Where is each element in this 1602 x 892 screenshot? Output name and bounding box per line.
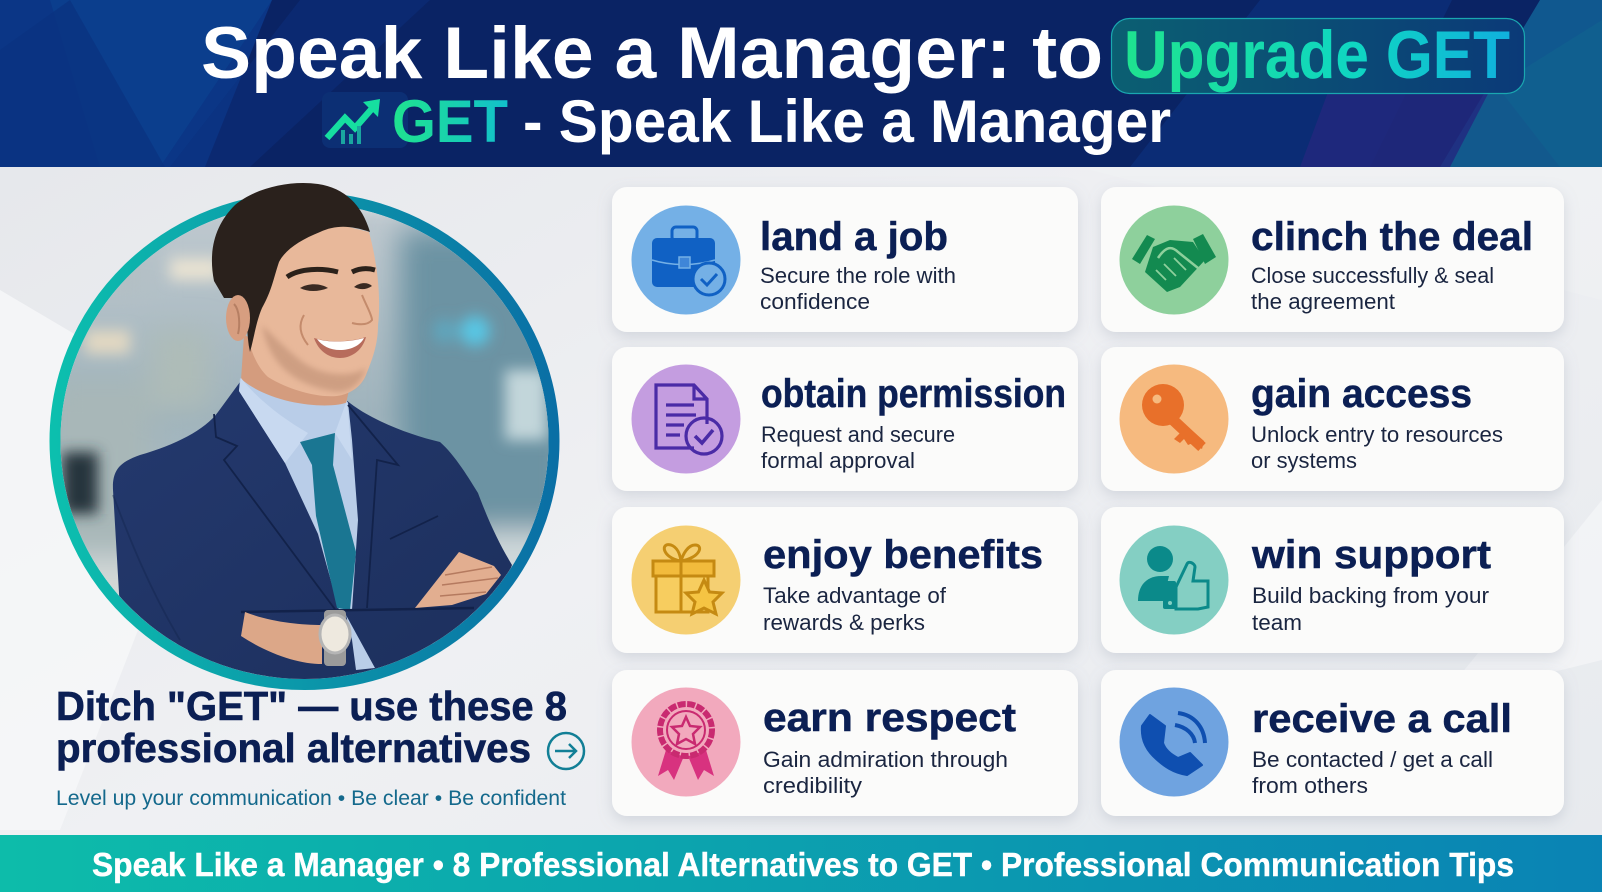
card: gain access: or systems — [1251, 448, 1357, 473]
card: gain access: Unlock entry to resources — [1251, 422, 1503, 447]
icon: phone — [1142, 713, 1205, 775]
icon: document with check — [656, 385, 722, 454]
brows and eyes — [287, 269, 375, 345]
tagline: Level up your communication • Be clear • Be confident — [56, 787, 566, 810]
icon: briefcase — [652, 227, 725, 295]
icon: rosette — [658, 704, 714, 780]
card: earn respect: credibility — [763, 773, 862, 798]
lapel lines — [113, 405, 474, 640]
card: earn respect — [612, 670, 1078, 816]
card: win support: win support — [1251, 533, 1491, 577]
icon: gift with star — [653, 545, 722, 614]
card: receive a call — [1101, 670, 1564, 816]
card: gain access: gain access — [1251, 372, 1472, 416]
jacket — [113, 382, 512, 700]
card: clinch the deal: Close successfully & seal — [1251, 263, 1494, 288]
footer banner — [0, 835, 1602, 892]
heading: ditch get: professional alternatives — [56, 725, 531, 771]
card: land a job — [612, 187, 1078, 332]
card: clinch the deal: the agreement — [1251, 289, 1395, 314]
smile — [314, 337, 366, 358]
header banner — [0, 0, 1602, 167]
card: enjoy benefits: Take advantage of — [763, 583, 947, 608]
card: land a job: Secure the role with — [760, 263, 956, 288]
card: enjoy benefits — [612, 507, 1078, 653]
footer banner: Speak Like a Manager • 8 Professional Alternatives to GET • Professional Communication Tips — [92, 846, 1514, 883]
card: obtain permission: obtain permission — [761, 372, 1066, 416]
card: enjoy benefits: enjoy benefits — [763, 533, 1043, 577]
stubble shading — [262, 325, 366, 392]
card: gain access — [1101, 347, 1564, 491]
card: win support — [1101, 507, 1564, 653]
card: receive a call: from others — [1252, 773, 1368, 798]
card: win support: Build backing from your — [1252, 583, 1489, 608]
card: clinch the deal: clinch the deal — [1251, 215, 1533, 259]
title line 2: GET — [392, 88, 508, 155]
icon: key — [1142, 384, 1204, 449]
title line 2: - Speak Like a Manager — [523, 88, 1171, 155]
card: enjoy benefits: rewards & perks — [763, 610, 925, 635]
card: land a job: land a job — [760, 215, 948, 259]
left hand — [241, 612, 322, 664]
neck — [241, 336, 348, 406]
right hand — [415, 552, 501, 608]
card: earn respect: earn respect — [763, 696, 1016, 740]
tie — [300, 433, 356, 610]
card: receive a call: Be contacted / get a call — [1252, 747, 1493, 772]
icon: person with thumbs up — [1138, 546, 1208, 609]
watch — [320, 610, 350, 666]
man — [113, 183, 512, 700]
title line 1: Speak Like a Manager: to — [201, 13, 1103, 94]
face — [246, 215, 379, 396]
portrait photo in ring — [40, 170, 570, 700]
hair — [212, 183, 370, 352]
card: win support: team — [1252, 610, 1302, 635]
heading: ditch get: Ditch "GET" — use these 8 — [56, 683, 567, 729]
card: earn respect: Gain admiration through — [763, 747, 1008, 772]
shirt cuff — [346, 615, 375, 670]
ear — [226, 295, 250, 341]
title highlight pill: Upgrade GET — [1124, 17, 1510, 93]
card: obtain permission: formal approval — [761, 448, 915, 473]
card: clinch the deal — [1101, 187, 1564, 332]
card: land a job: confidence — [760, 289, 870, 314]
icon: arrow in circle — [548, 733, 584, 769]
icon: handshake — [1132, 234, 1216, 292]
icon: growth chart arrow — [322, 92, 408, 148]
shirt — [239, 378, 358, 610]
card: obtain permission: Request and secure — [761, 422, 955, 447]
card: obtain permission — [612, 347, 1078, 491]
heading: ditch get — [56, 683, 567, 771]
card: receive a call: receive a call — [1252, 697, 1512, 741]
